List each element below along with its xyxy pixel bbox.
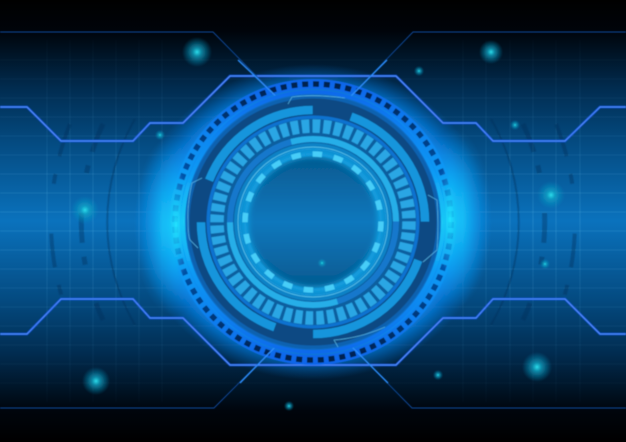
central disc xyxy=(234,143,392,301)
dark segmented ring xyxy=(188,97,438,347)
top and bottom crossing highlights xyxy=(238,60,388,383)
tick ring, inner xyxy=(217,126,409,318)
inner disc xyxy=(247,156,379,288)
dashed glowing ring xyxy=(245,154,381,290)
thin rings xyxy=(238,147,388,297)
light arc segments, outer xyxy=(201,110,425,334)
circuit lines, thick xyxy=(0,76,626,365)
ring glow xyxy=(134,64,492,380)
middle arc ring xyxy=(230,139,396,305)
bright ring xyxy=(183,92,443,352)
circuit lines, thick highlight xyxy=(0,76,626,365)
faint background arcs xyxy=(51,119,575,325)
outer tick ring xyxy=(175,84,451,360)
side highlights over the ring xyxy=(163,156,463,288)
glowing dots xyxy=(71,37,565,411)
inner panel behind ticks xyxy=(210,119,416,325)
thin notched outlines xyxy=(188,96,438,347)
